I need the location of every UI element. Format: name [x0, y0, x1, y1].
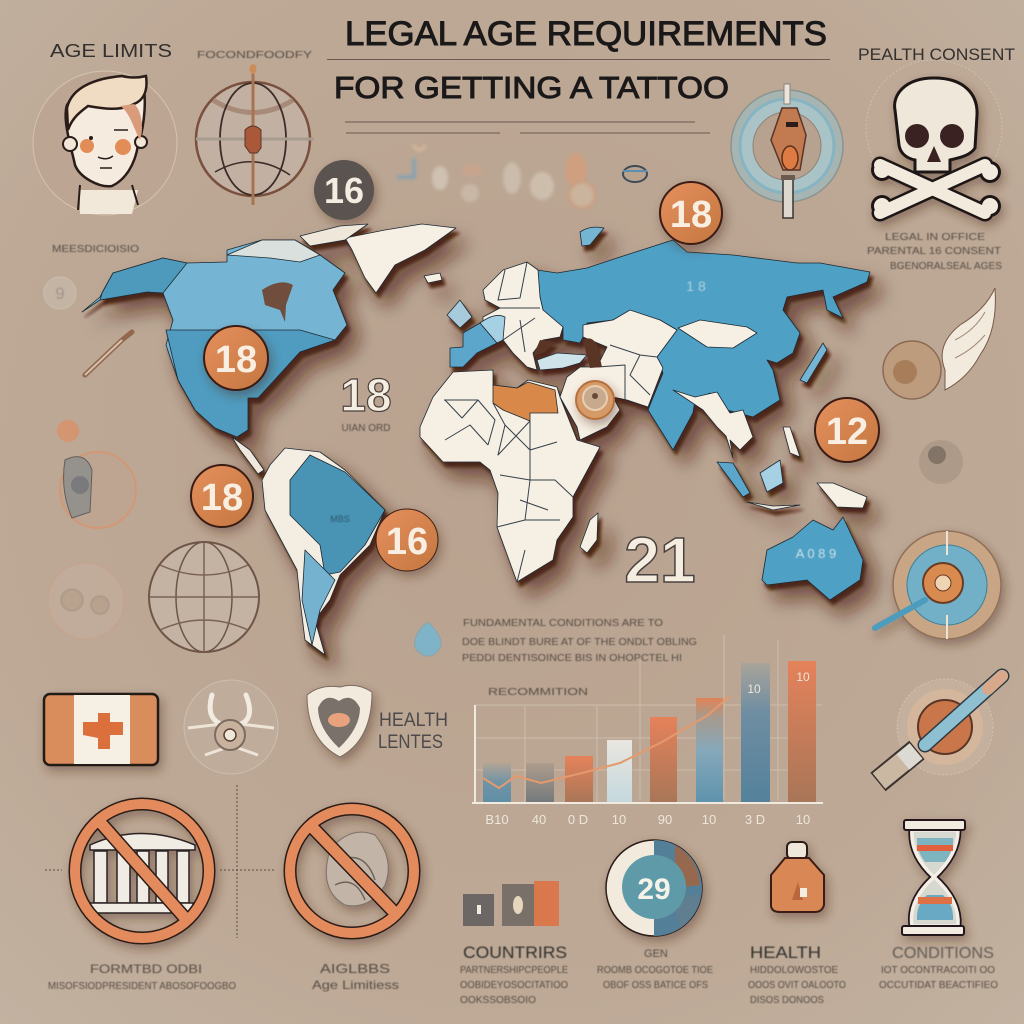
icon: heart shield — [307, 685, 372, 757]
caption: tattoo sign — [312, 961, 399, 992]
caption: tattoo sign: Age Limitiess — [312, 978, 399, 992]
icon: dashed cross guides — [45, 785, 275, 938]
middle east and central asia — [533, 310, 677, 440]
text: chart description: DOE BLINDT BURE AT OF THE ONDLT OBLING — [462, 637, 697, 648]
trend line — [483, 696, 730, 788]
text: chart description: FUNDAMENTAL CONDITIONS ARE TO — [463, 618, 663, 629]
caption: building sign: FORMTBD ODBI — [90, 962, 202, 976]
icon: donut with 29: 29 — [637, 873, 671, 906]
arctic islands — [300, 224, 368, 246]
badge: 16 south america — [376, 509, 438, 571]
world map — [82, 224, 870, 655]
icon: skull and crossbones — [866, 60, 1002, 217]
axis labels: 0 D — [568, 812, 588, 827]
philippines — [783, 427, 800, 457]
south america — [262, 448, 385, 655]
text: health lentes: HEALTH — [379, 710, 448, 731]
badge: 18 north america — [204, 326, 268, 390]
text: chart description: PEDDI DENTISOINCE BIS IN OHOPCTEL HI — [462, 653, 682, 664]
icon: needle sketch — [85, 332, 132, 375]
icon: wire globe — [149, 542, 259, 652]
text: skull caption: LEGAL IN OFFICE — [885, 232, 985, 243]
mongolia — [678, 320, 757, 348]
text: chart description — [462, 618, 697, 698]
text block: countries — [460, 943, 568, 1006]
text: skull caption — [867, 232, 1002, 272]
australia — [762, 517, 863, 600]
badge: 12 — [815, 398, 879, 462]
new guinea — [817, 483, 867, 508]
sumatra — [717, 462, 750, 497]
caption under 18: UIAN ORD — [342, 423, 390, 434]
text block: health — [748, 943, 846, 1006]
icon: faint left coin — [44, 277, 76, 309]
title — [327, 15, 830, 133]
text: chart description: RECOMMITION — [488, 687, 588, 698]
text: skull caption: BGENORALSEAL AGES — [890, 261, 1002, 272]
icon: face — [33, 71, 177, 215]
caption: building sign: MISOFSIODPRESIDENT ABOSOFOOGBO — [48, 981, 236, 992]
icon: syringe on dial — [878, 676, 1002, 782]
icon: small pill — [623, 166, 647, 182]
heading: age limits: AGE LIMITS — [50, 41, 172, 61]
badge: 18 asia — [660, 182, 722, 244]
badge: 18 west — [191, 465, 253, 527]
icon: canadian flag — [44, 694, 158, 765]
title: FOR GETTING A TATTOO — [334, 70, 729, 105]
map labels — [330, 278, 836, 561]
badge: 18 west: 18 — [201, 477, 243, 519]
map labels: 1 8 — [686, 278, 706, 294]
icon: hourglass — [902, 820, 965, 935]
text block: conditions: CONDITIONS — [892, 945, 994, 962]
axis labels: 90 — [658, 812, 672, 827]
text block: health: DISOS DONOOS — [750, 995, 824, 1006]
badge: 16 south america: 16 — [386, 521, 428, 563]
icon: dial with tattoo machine — [731, 84, 843, 218]
icon: mini bars — [463, 881, 559, 926]
icon: health bottle — [771, 842, 824, 912]
icon: prohibited building — [75, 804, 209, 938]
badge: 16: 16 — [324, 170, 364, 211]
java — [747, 502, 800, 510]
novaya zemlya — [580, 227, 604, 246]
text block: conditions: OCCUTIDAT BEACTIFIEO — [879, 980, 998, 991]
southeast asia — [673, 390, 753, 458]
icon: donut with 29 — [606, 840, 702, 936]
eurasia blue — [537, 240, 870, 450]
badge: 18 north america: 18 — [215, 339, 257, 381]
text block: health: OOOS OVIT OALOOTO — [748, 980, 846, 991]
axes — [472, 705, 823, 803]
text block: countries: OOKSSOBSOIO — [460, 995, 536, 1006]
iceland — [424, 273, 442, 283]
text block: gen: GEN — [644, 948, 668, 960]
axis labels: 10 — [796, 812, 810, 827]
heading: health consent: PEALTH CONSENT — [858, 45, 1015, 64]
text block: gen: OBOF OSS BATICE OFS — [603, 980, 708, 991]
number: 18: 18 — [340, 369, 392, 421]
europe — [447, 262, 563, 370]
caption: tattoo sign: AIGLBBS — [320, 961, 390, 976]
icon: prohibited tattoo — [290, 809, 414, 933]
text block: conditions — [879, 945, 998, 991]
icon: horned emblem — [184, 680, 278, 774]
text block: gen: ROOMB OCOGOTOE TIOE — [597, 965, 713, 976]
text block: countries: PARTNERSHIPCPEOPLE — [460, 965, 568, 976]
badge: 12: 12 — [826, 411, 868, 453]
icon: small drop — [414, 622, 441, 656]
caption: building sign — [48, 962, 236, 992]
pin on arabia — [576, 381, 614, 419]
caption under face: MEESDICIOISIO — [52, 244, 139, 255]
axis labels: 10 — [747, 682, 761, 696]
axis labels: B10 — [485, 812, 509, 827]
icon: faint left coin: 9 — [55, 284, 65, 303]
icon: compass target — [875, 531, 1001, 639]
map labels: A 0 8 9 — [796, 546, 836, 561]
title: LEGAL AGE REQUIREMENTS — [345, 15, 827, 53]
axis labels — [485, 670, 810, 827]
badge: 16 — [314, 160, 374, 220]
text: health lentes: LENTES — [378, 732, 443, 753]
icon: machine left — [60, 452, 136, 528]
badge: 18 asia: 18 — [670, 194, 712, 236]
japan — [800, 343, 827, 383]
borneo — [760, 460, 783, 492]
icon: faint gauge — [48, 563, 124, 639]
number: 21: 21 — [624, 524, 696, 596]
icon: winged coin — [883, 288, 995, 399]
axis labels: 10 — [702, 812, 716, 827]
text: health lentes — [378, 710, 448, 753]
icon: faint coin right — [919, 440, 963, 484]
text block: countries: OOBIDEYOSOCITATIOO — [460, 980, 568, 991]
icon: globe with tattoo needle — [196, 64, 314, 205]
axis labels: 40 — [532, 812, 546, 827]
madagascar — [580, 513, 598, 553]
text: skull caption: PARENTAL 16 CONSENT — [867, 246, 1001, 257]
axis labels: 10 — [796, 670, 810, 684]
axis labels: 10 — [612, 812, 626, 827]
north america — [82, 240, 347, 474]
axis labels: 3 D — [745, 812, 765, 827]
text block: health: HIDDOLOWOSTOE — [750, 965, 838, 976]
africa — [420, 370, 600, 582]
text block: health: HEALTH — [750, 943, 821, 962]
text block: conditions: IOT OCONTRACOITI OO — [881, 965, 995, 976]
greenland and arctic — [345, 224, 456, 293]
text block: countries: COUNTRIRS — [463, 943, 567, 962]
faint decoration icons top centre — [397, 145, 595, 208]
bar chart — [472, 635, 823, 827]
bars — [483, 661, 816, 803]
map labels: MBS — [330, 514, 350, 524]
icon: small orange coin — [57, 420, 79, 442]
small caption top: FOCONDFOODFY — [197, 50, 312, 61]
text block: gen — [597, 948, 713, 991]
